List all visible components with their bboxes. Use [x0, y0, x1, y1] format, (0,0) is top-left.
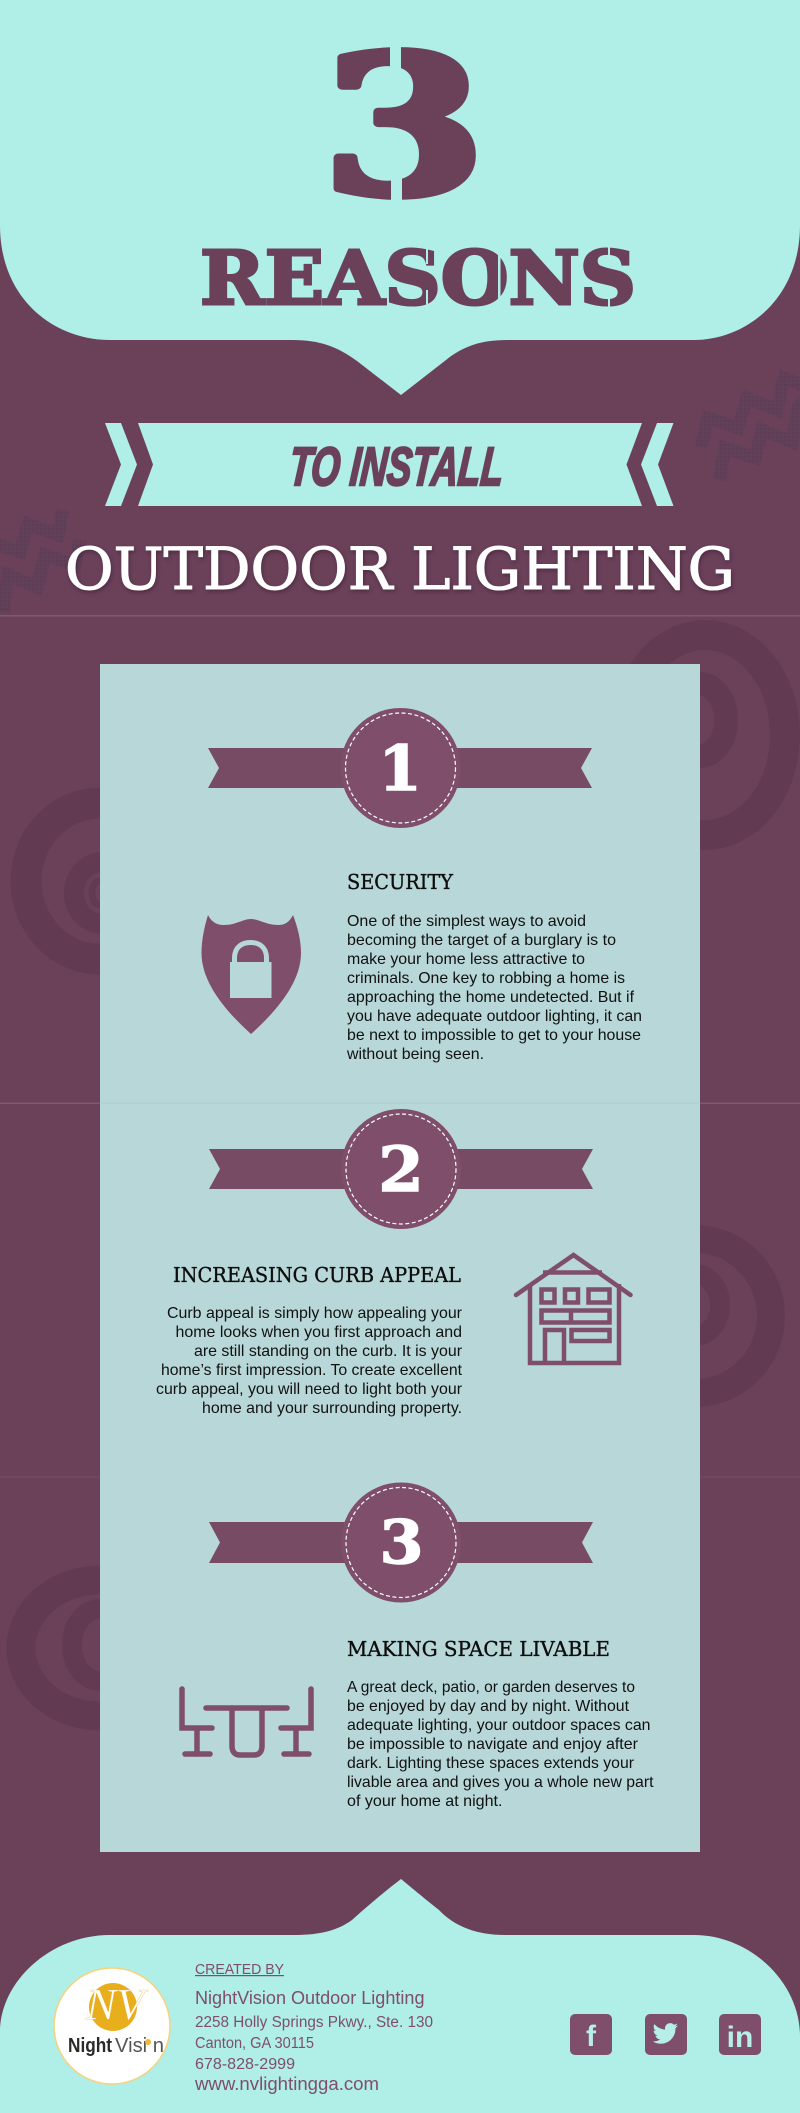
decorative spiral: middle left — [26, 803, 174, 959]
paragraph: curb appeal: Curb appeal is simply how appealing your — [167, 1305, 463, 1322]
content panel — [100, 664, 700, 1852]
paragraph: livable space — [347, 1679, 654, 1810]
icon: linkedin — [719, 2014, 761, 2055]
banner: to install — [105, 423, 674, 506]
reason 1 badge: 1 — [378, 732, 422, 805]
decorative zigzag: top right — [701, 378, 800, 480]
left chevron — [105, 423, 137, 506]
paragraph: security: approaching the home undetected. But if — [347, 989, 635, 1006]
logo: Night — [68, 2035, 112, 2057]
reason 2 badge: 2 — [378, 1132, 424, 1206]
paragraph: curb appeal: curb appeal, you will need to light both your — [156, 1381, 463, 1398]
created by: CREATED BY — [195, 1961, 284, 1978]
title: REASONS: REASONS — [200, 236, 636, 322]
paragraph: security: without being seen. — [346, 1046, 484, 1063]
decorative spiral: top right — [625, 635, 785, 835]
icon: house — [516, 1255, 630, 1363]
decorative zigzag: left — [0, 510, 80, 612]
paragraph: security: becoming the target of a burglary is to — [347, 932, 616, 949]
header panel — [0, 0, 800, 395]
reason 2 badge — [209, 1109, 593, 1229]
paragraph: livable space: be enjoyed by day and by night. Without — [347, 1698, 630, 1715]
banner text: TO INSTALL — [287, 437, 506, 497]
logo — [54, 1968, 170, 2084]
paragraph: livable space: dark. Lighting these spaces extends your — [347, 1755, 635, 1772]
icon: picnic table — [182, 1689, 311, 1755]
icon: shield with padlock — [202, 915, 301, 1034]
icon: twitter — [645, 2014, 687, 2055]
paragraph: livable space: be impossible to navigate and enjoy after — [347, 1736, 639, 1753]
reason 3 text — [347, 1637, 654, 1810]
paragraph: curb appeal: are still standing on the curb. It is your — [194, 1343, 463, 1360]
decorative spiral: middle right — [619, 1239, 771, 1393]
paragraph: curb appeal: home and your surrounding property. — [202, 1400, 462, 1417]
paragraph: security: make your home less attractive to — [347, 951, 585, 968]
decorative spiral: lower left — [21, 1580, 179, 1716]
paragraph: security: criminals. One key to robbing a home is — [347, 970, 625, 987]
heading: security: SECURITY — [347, 870, 453, 894]
right chevron — [641, 423, 674, 506]
paragraph: livable space: of your home at night. — [347, 1793, 502, 1810]
title: outdoor lighting: OUTDOOR LIGHTING — [65, 535, 735, 603]
paragraph: security: One of the simplest ways to avoid — [347, 913, 586, 930]
paragraph: curb appeal: home’s first impression. To create excellent — [161, 1362, 463, 1379]
credits: Canton, GA 30115 — [195, 2035, 314, 2052]
paragraph: security: you have adequate outdoor lighting, it can — [347, 1008, 642, 1025]
paragraph: livable space: livable area and gives you a whole new part — [347, 1774, 654, 1791]
reason 1 badge — [208, 708, 592, 828]
credits — [194, 1961, 433, 2094]
title: big number 3: 3 — [322, 14, 486, 238]
ribbon — [138, 423, 642, 506]
heading: making space livable: MAKING SPACE LIVABLE — [347, 1637, 610, 1661]
website: www.nvlightingga.com — [194, 2074, 379, 2094]
paragraph: security — [346, 913, 642, 1063]
reason 1 text — [346, 870, 642, 1063]
logo: NV — [85, 1980, 149, 2029]
icon: linkedin: in — [727, 2021, 753, 2054]
logo: Visi n — [115, 2035, 164, 2057]
paragraph: curb appeal — [156, 1305, 463, 1417]
phone: 678-828-2999 — [195, 2056, 295, 2073]
icon: facebook — [570, 2014, 612, 2055]
footer panel — [0, 1879, 800, 2113]
paragraph: livable space: adequate lighting, your outdoor spaces can — [347, 1717, 650, 1734]
reason 2 text — [156, 1263, 463, 1417]
paragraph: livable space: A great deck, patio, or garden deserves to — [347, 1679, 635, 1696]
address: 2258 Holly Springs Pkwy., Ste. 130 — [195, 2014, 433, 2031]
heading: increasing curb appeal: INCREASING CURB APPEAL — [173, 1263, 461, 1287]
company name: NightVision Outdoor Lighting — [195, 1988, 424, 2008]
reason 3 badge — [209, 1482, 593, 1602]
reason 3 badge: 3 — [380, 1506, 423, 1578]
paragraph: curb appeal: home looks when you first approach and — [176, 1324, 462, 1341]
paragraph: security: be next to impossible to get to your house — [347, 1027, 641, 1044]
icon: facebook: f — [586, 2020, 597, 2053]
